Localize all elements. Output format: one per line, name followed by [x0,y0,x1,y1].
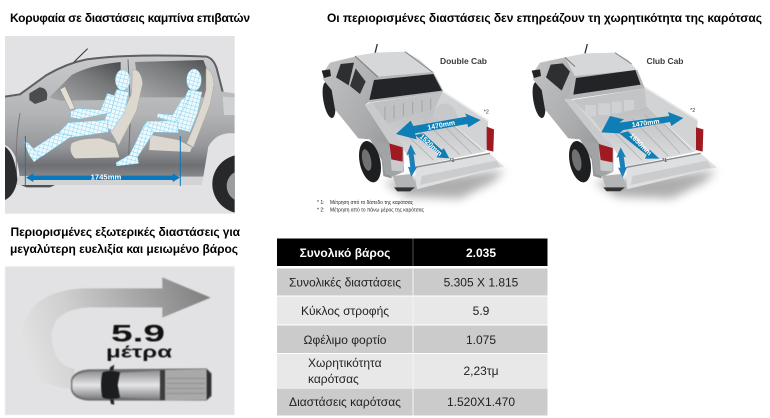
row: overall dimensions: 5.305 X 1.815 [444,276,519,290]
door mirror [532,69,541,78]
arrow: bed width [601,112,683,133]
panel: double cab truck: 475 [403,158,410,168]
bed right wall [435,92,488,152]
label: 1745mm: 1745mm [91,172,122,181]
panel: club cab truck: 1650mm [628,133,652,157]
row: bed capacity [277,354,548,388]
truck top view [71,365,212,405]
spec table [277,238,548,416]
row: turning circle: Κύκλος στροφής [301,304,389,318]
arrow: bed height [616,147,627,177]
side window [546,63,570,91]
tail lights [389,143,403,172]
arrow: bed length [415,133,449,158]
panel: double cab truck: *1 [449,158,455,164]
side windows [336,63,354,85]
measurement guide lines [25,136,180,186]
panel: double cab truck: *2 [484,109,489,115]
title: cargo bed: Οι περιορισμένες διαστάσεις δεν επηρεάζουν τη χωρητικότητα της καρότσας [327,11,762,25]
labels on bed: 1470mm [427,120,456,132]
rear wheel [212,156,235,212]
table header [277,238,548,266]
rear seat [187,68,214,147]
table header: Συνολικό βάρος [300,246,390,260]
label: 5.9 metres: 5.9 [111,320,165,348]
panel: club cab truck: *2 [690,108,695,114]
side rail [365,102,405,148]
antenna [375,44,377,53]
footnotes: Μέτρηση από το δάπεδο της καρότσας [330,199,414,206]
panel: turning circle: μέτρα [106,342,173,362]
title: passenger cabin: Κορυφαία σε διαστάσεις καμπίνα επιβατών [10,11,250,25]
row: bed dimensions [277,388,548,416]
rear body corner [580,139,613,177]
labels on bed: 1470mm [631,118,660,129]
heading: exterior dimensions: Περιορισμένες εξωτερικές διαστάσεις για [10,225,241,239]
ground shadow [383,170,505,198]
heading: exterior dimensions [10,225,241,256]
row: payload: 1.075 [466,333,496,347]
row: payload: Ωφέλιμο φορτίο [304,333,387,347]
front wheel [5,147,17,200]
front wheel [320,81,338,119]
rear window [369,74,442,100]
rear body corner [370,139,404,177]
panel: double cab truck [320,44,505,198]
row: bed dimensions: 1.520X1.470 [447,395,515,409]
door mirror [322,69,331,78]
inner left wall [372,103,415,167]
footnotes: * 2: [317,208,325,214]
heading: exterior dimensions: μεγαλύτερη ευελιξία και μειωμένο βάρος [10,242,238,256]
cab and side body [533,57,602,178]
row: overall dimensions [277,268,548,296]
row: overall dimensions: Συνολικές διαστάσεις [289,276,401,290]
arrow: 1745mm [26,173,180,182]
arrow: bed width [396,113,481,139]
bed front wall [372,92,443,125]
steering wheel [60,87,75,110]
row: turning circle: 5.9 [473,304,490,318]
rear wheel [566,139,594,184]
ground shadow [593,170,717,198]
bumper [602,174,627,190]
rear passenger mannequin [116,69,202,166]
side windows [49,62,121,101]
cab rear wall [368,72,444,103]
bed floor [387,109,485,167]
side rail [565,99,615,148]
mirror [29,87,47,104]
label: Double Cab: Double Cab [440,56,487,66]
arrow: bed height [406,144,417,177]
rear wheel [356,139,384,184]
bumper [393,174,417,190]
arrow: bed length [619,131,659,159]
cab rear wall [566,70,645,100]
footnotes: * 1: [317,200,325,206]
icon: turning arrow [22,277,211,389]
table header: 2.035 [466,246,496,260]
truck side body [5,55,235,185]
tail lights [599,144,613,172]
bed floor [593,107,695,167]
front seat [110,70,143,145]
row: turning circle [277,296,548,324]
front passenger mannequin [24,70,130,162]
panel: cabin cutaway [5,36,235,214]
panel: double cab truck: 1520mm [418,133,443,158]
footnotes [317,199,425,214]
bed right wall [645,88,698,152]
tailgate [415,153,504,189]
roof [565,53,637,77]
roof [355,52,433,77]
wheel arch bump [433,103,458,125]
row: bed capacity: καρότσας [308,372,359,386]
antenna [74,49,88,62]
rear window [573,70,641,95]
row: payload [277,326,548,353]
panel: club cab truck [530,44,717,198]
inner left wall [572,100,627,167]
cab and side body [323,57,392,178]
footnotes: Μέτρηση από το πάνω μέρος της καρότσας [330,206,425,214]
bed front wall [572,88,647,119]
panel: club cab truck: *1 [662,158,667,164]
row: bed dimensions: Διαστάσεις καρότσας [289,395,401,409]
tailgate [627,153,717,189]
front wheel [530,81,548,119]
label: Club Cab: Club Cab [646,56,684,66]
antenna [585,44,587,53]
panel: turning circle [5,266,234,415]
row: bed capacity: 2,23τμ [463,364,499,378]
row: bed capacity: Χωρητικότητα [308,356,382,370]
side sill [15,176,203,185]
